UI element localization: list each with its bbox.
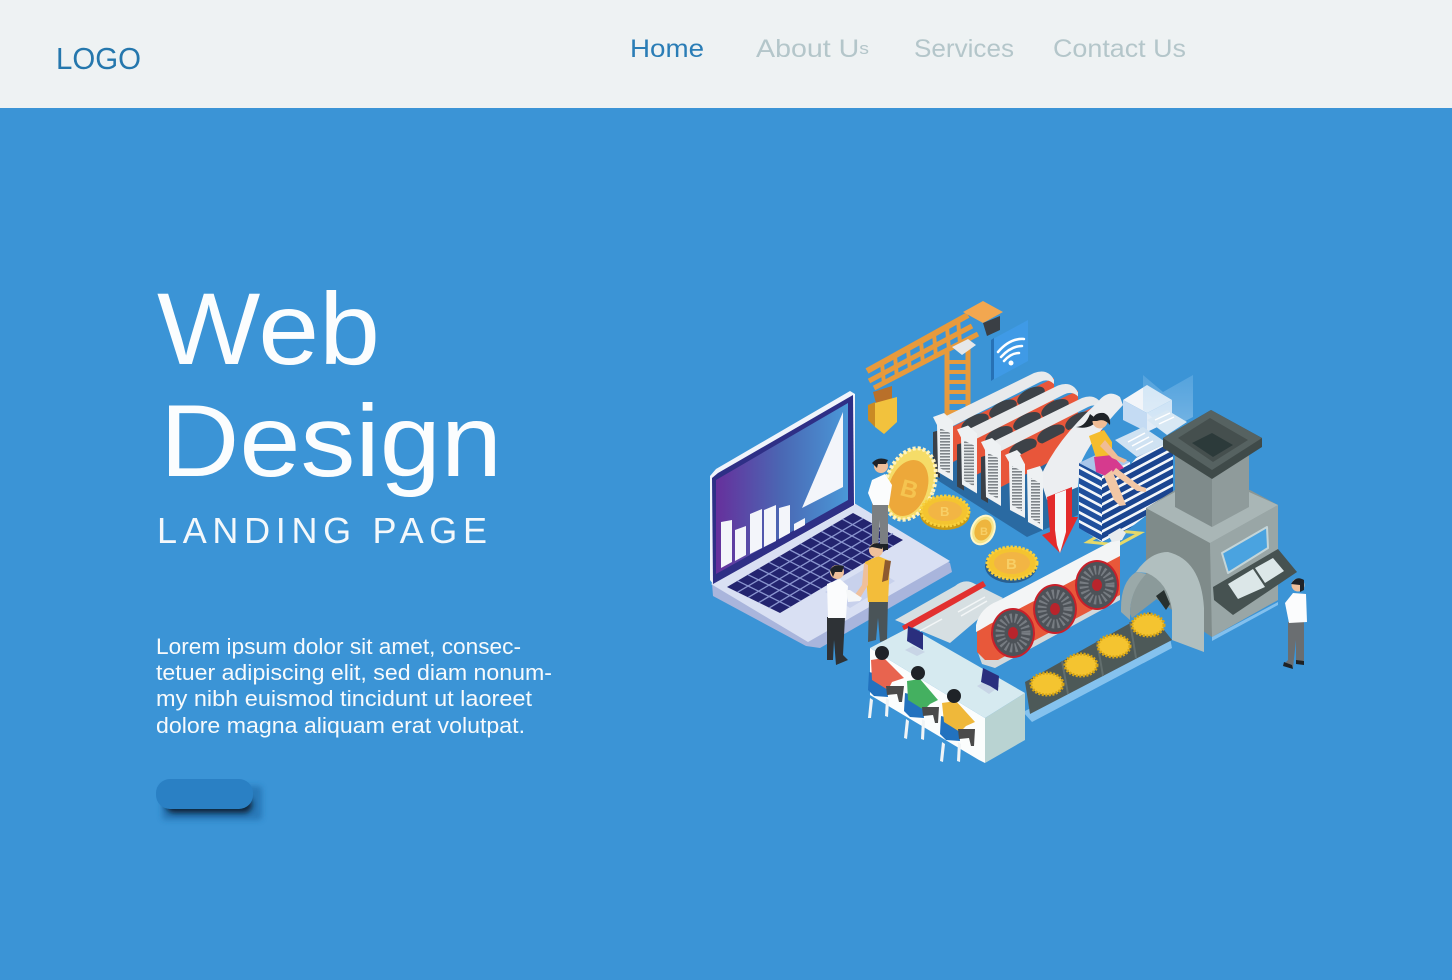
person: red shirt: [868, 646, 904, 718]
coin: [920, 496, 970, 530]
coin: [985, 547, 1037, 583]
title: Web Design: [157, 272, 502, 498]
nav: About Us: About U: [756, 35, 846, 63]
control panel: [1213, 549, 1297, 615]
small tilted coin: B: [980, 526, 988, 538]
fans: [991, 560, 1119, 658]
large gear coin: B: [897, 475, 921, 505]
person: man in white shirt: [827, 565, 862, 665]
nav: Contact Us: Contact Us: [1053, 35, 1186, 63]
laptop chart: [721, 412, 843, 568]
machine window: [1222, 527, 1268, 573]
nav: Home: Home: [630, 35, 704, 63]
body paragraph: Lorem ipsum dolor sit amet, consec-: [156, 634, 521, 659]
funnel machine: [1146, 410, 1297, 641]
server towers: [1079, 375, 1193, 545]
subtitle: landing page: LANDING PAGE: [157, 510, 487, 551]
machine arch: [1121, 552, 1204, 652]
coins: [875, 441, 1037, 583]
coin: B: [940, 504, 949, 519]
small laptop: [977, 668, 1000, 694]
person: man in yellow: [854, 543, 891, 642]
large gear coin: [875, 441, 945, 527]
conveyor belt: [1023, 612, 1172, 722]
body paragraph: my nibh euismod tincidunt ut laoreet: [156, 686, 532, 711]
person: orange shirt: [940, 689, 975, 762]
nav: Services: Services: [914, 35, 1014, 63]
crane: [867, 301, 1003, 434]
small laptop: [905, 626, 925, 656]
person: man at machine: [1283, 578, 1307, 669]
conveyor coins: [1031, 673, 1063, 695]
desk with laptops: [870, 626, 1025, 763]
flat card panel: [895, 581, 1003, 643]
body paragraph: [156, 634, 552, 738]
seated people: [868, 646, 975, 762]
wifi tile: [991, 320, 1028, 381]
person: man with coin: [868, 459, 892, 550]
coin: B: [1006, 556, 1017, 573]
red down arrow: [1042, 487, 1078, 553]
laptop: [710, 391, 952, 648]
nav: About Us: s: [859, 39, 869, 58]
navigation header: [0, 0, 1452, 108]
small tilted coin: [967, 512, 999, 548]
button: [156, 779, 262, 820]
title: Web Design: Design: [160, 384, 502, 498]
logo: LOGO: [56, 41, 141, 76]
title: Web Design: Web: [157, 272, 380, 386]
woman sitting: [1076, 413, 1146, 506]
body paragraph: dolore magna aliquam erat volutpat.: [156, 713, 525, 738]
graphics card: [976, 528, 1126, 668]
mining rigs: [933, 372, 1123, 537]
isometric illustration: [710, 301, 1307, 763]
person: green shirt: [904, 666, 939, 740]
body paragraph: tetuer adipiscing elit, sed diam nonum-: [156, 660, 552, 685]
